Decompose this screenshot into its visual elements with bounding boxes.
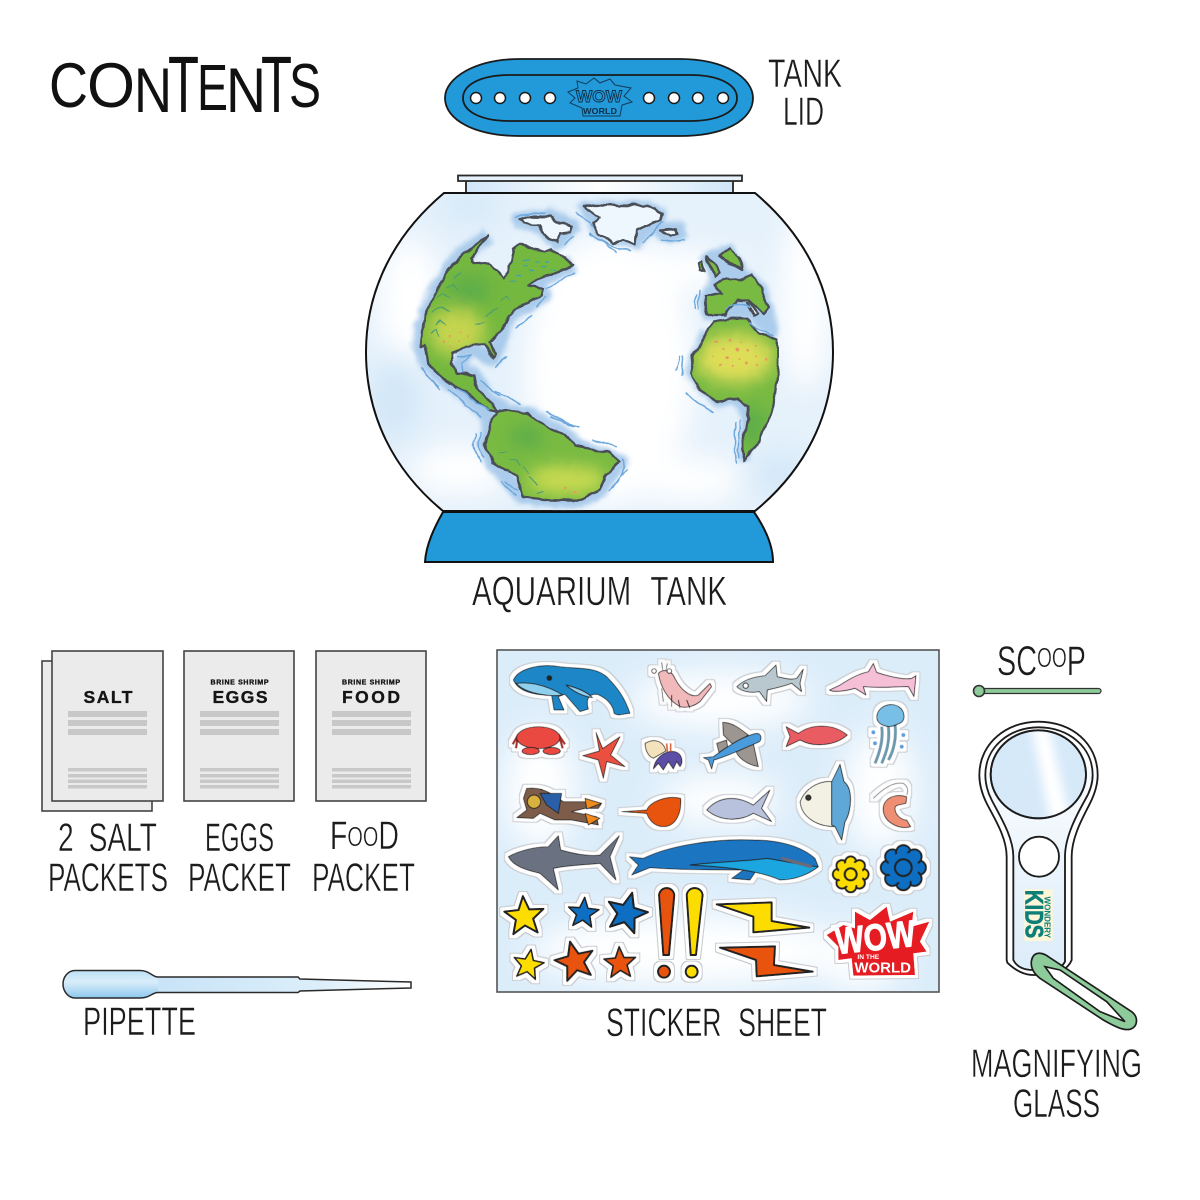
sticker: diver [517, 788, 602, 825]
label: salt packets: PACKETS [48, 856, 168, 900]
sticker: jellyfish [871, 705, 905, 763]
panel: sticker sheet [497, 650, 939, 992]
tank base [425, 512, 773, 562]
salt packets [42, 651, 163, 811]
icon: scoop [974, 686, 1101, 696]
label: tank lid: TANK [768, 52, 842, 96]
label: scoop: OO [1037, 642, 1067, 673]
sticker: hermit crab [645, 741, 682, 770]
icon: tank lid: WOW [576, 87, 623, 106]
label: food packet: OO [347, 821, 378, 852]
label: magnifying glass [971, 1042, 1142, 1126]
label: eggs packet: EGGS [205, 816, 274, 860]
land colour patches [428, 277, 773, 495]
sticker: pink dolphin [829, 663, 916, 697]
coastal ripples [422, 213, 773, 495]
sticker: horseshoe crab [622, 797, 681, 827]
sticker: wow badge: WORLD [854, 960, 911, 976]
title [49, 40, 321, 129]
label: pipette: PIPETTE [83, 1000, 196, 1044]
sticker: wow badge [827, 907, 929, 976]
title: T [168, 40, 199, 129]
icon: tank lid: WORLD [583, 106, 617, 116]
tank rim [458, 176, 742, 193]
label: sticker sheet: STICKER SHEET [606, 1001, 827, 1045]
Europe [705, 275, 768, 315]
logo: wondery kids: WONDERY [1042, 896, 1052, 938]
eggs packet: BRINE SHRIMP [210, 680, 269, 686]
sticker: grey shark [737, 665, 803, 702]
sticker: lightning bolts [717, 902, 813, 976]
sticker: sunfish [800, 764, 850, 840]
sticker: starfish [583, 732, 625, 778]
logo: wondery kids: KIDS [1020, 890, 1047, 938]
food packet: BRINE SHRIMP [342, 680, 400, 686]
North America [421, 235, 573, 412]
label: food packet: F [330, 814, 354, 858]
icon: aquarium tank [366, 176, 833, 562]
carabiner [1031, 953, 1136, 1030]
label: eggs packet [188, 816, 291, 900]
sticker: humpback whale [513, 666, 630, 715]
title: N [134, 56, 172, 126]
sticker: blue flower [881, 845, 926, 890]
title: E [197, 51, 228, 124]
eggs packet [184, 651, 294, 801]
sticker: wow badge: WOW [833, 912, 918, 962]
label: scoop: SC [997, 637, 1055, 684]
land outlines [421, 204, 778, 501]
salt packets: SALT [84, 687, 133, 707]
label: food packet: D [378, 814, 399, 858]
icon: magnifying glass [979, 722, 1136, 1030]
sticker: yellow flower [833, 856, 869, 892]
label: food packet [312, 814, 415, 900]
sticker: great white shark [508, 836, 619, 890]
sticker: brine shrimp [652, 662, 712, 708]
sticker: blue whale [629, 840, 818, 880]
South America [485, 410, 620, 501]
label: magnifying glass: GLASS [1013, 1082, 1100, 1126]
world map [421, 204, 778, 501]
label: food packet: PACKET [312, 856, 415, 900]
sticker: flying fish [703, 722, 761, 769]
title: N [226, 56, 266, 126]
sticker: silver fish [707, 790, 772, 822]
title: S [289, 52, 321, 121]
label: salt packets [48, 816, 168, 900]
food packet: FOOD [342, 687, 400, 707]
food packet [316, 651, 426, 801]
label: scoop: P [1067, 637, 1086, 684]
icon: pipette [63, 970, 411, 998]
label: salt packets: 2 SALT [58, 816, 157, 860]
label: eggs packet: PACKET [188, 856, 291, 900]
sticker: shrimp [873, 783, 911, 828]
label: tank lid [768, 52, 842, 134]
sticker: wow badge: IN THE [857, 954, 880, 961]
icon: tank lid [445, 59, 753, 136]
coastal halo [421, 206, 773, 501]
sticker: crab [513, 727, 565, 755]
title: C [49, 51, 88, 121]
sticker: red fish [786, 726, 847, 747]
sticker: stars [503, 887, 652, 983]
label: tank lid: LID [783, 90, 824, 134]
mountains and dots [430, 273, 543, 493]
eggs packet: EGGS [212, 687, 268, 707]
title: O [87, 51, 135, 121]
stickers [503, 662, 929, 983]
glass bowl [366, 191, 833, 511]
label: aquarium tank: AQUARIUM TANK [472, 568, 727, 614]
sticker: exclamation marks [658, 888, 703, 978]
Africa [690, 318, 778, 460]
title: T [261, 40, 292, 129]
